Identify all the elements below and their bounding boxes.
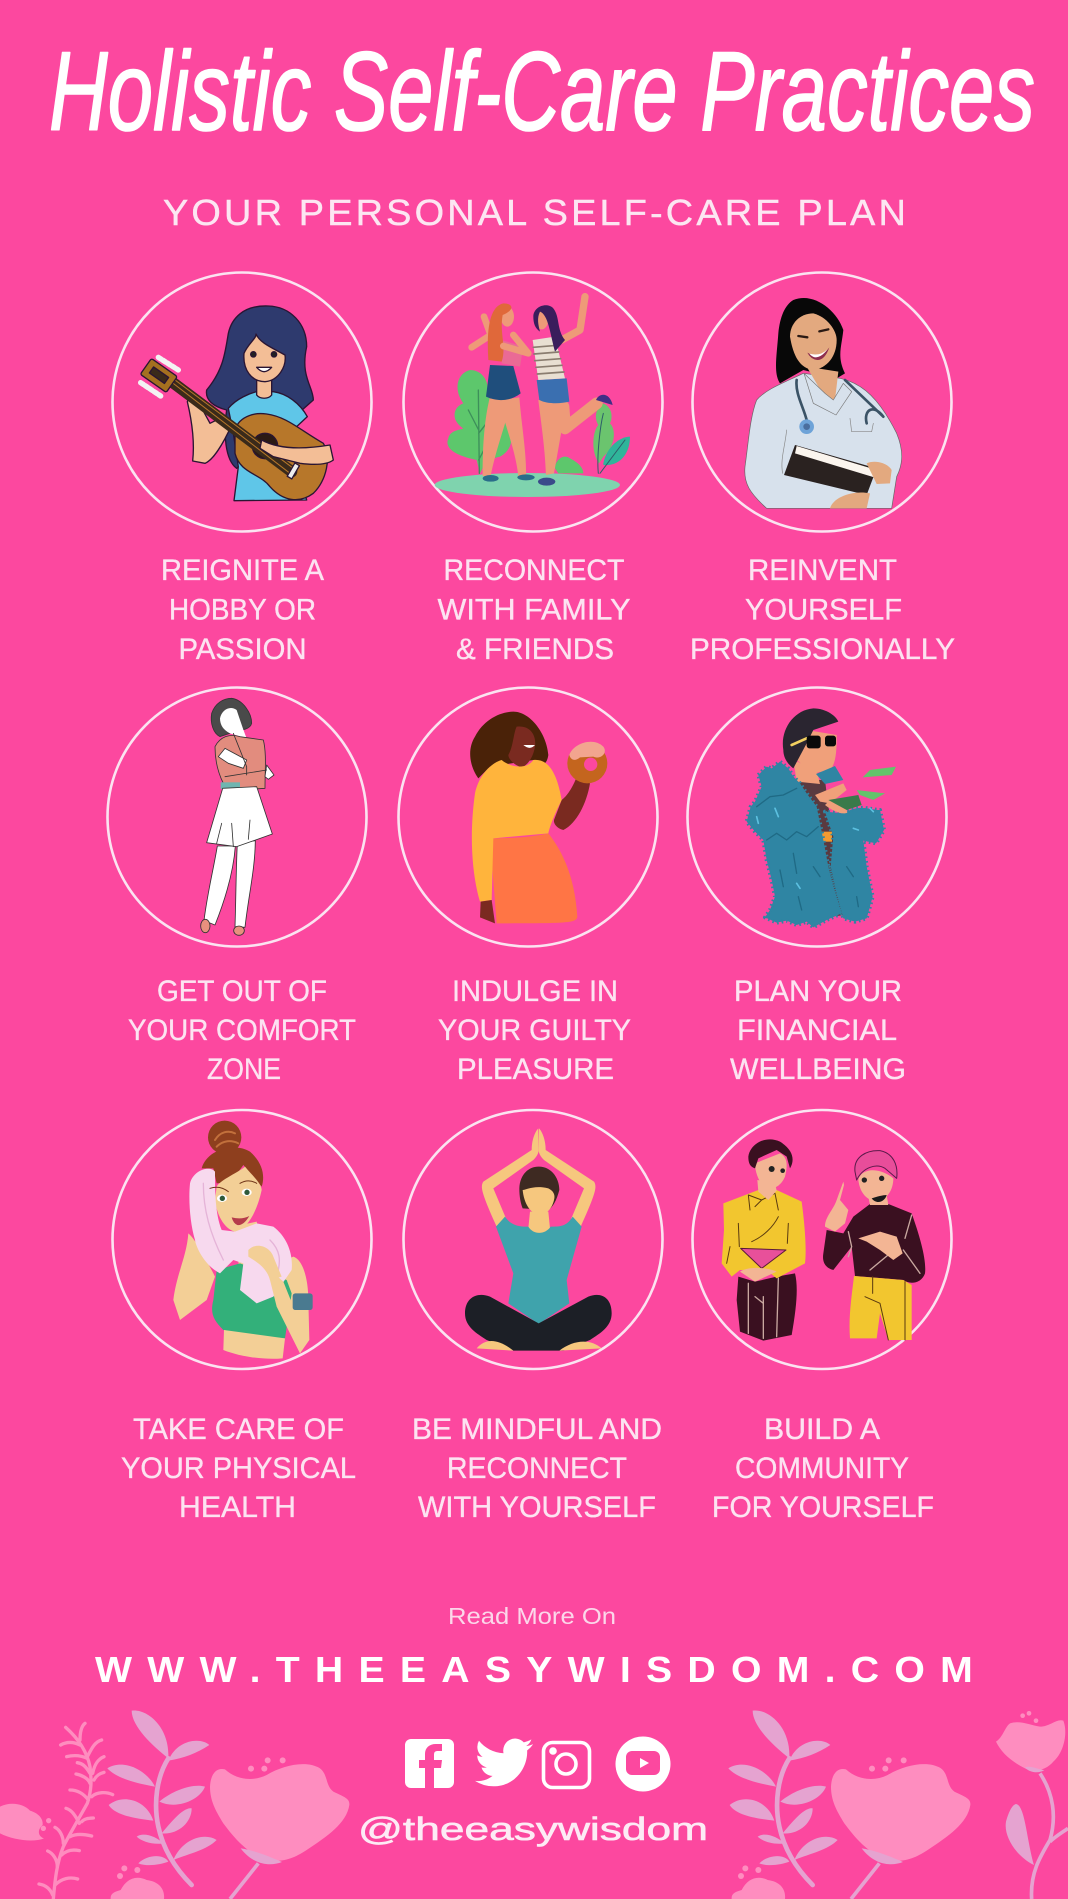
label [128, 975, 356, 1086]
label: PLEASURE [457, 1053, 614, 1086]
label [438, 975, 631, 1086]
website url: WWW.THEEASYWISDOM.COM [95, 1649, 988, 1690]
illustration: woman with donut [470, 712, 607, 923]
illustration: man in fur coat with money [747, 708, 896, 927]
subtitle: YOUR PERSONAL SELF-CARE PLAN [163, 192, 909, 233]
label: HEALTH [179, 1491, 296, 1524]
circle [108, 688, 366, 946]
label [730, 975, 906, 1086]
label: RECONNECT [444, 554, 624, 587]
label [121, 1413, 356, 1524]
label: TAKE CARE OF [133, 1413, 344, 1446]
read more text: Read More On [448, 1603, 616, 1629]
label: COMMUNITY [735, 1452, 909, 1485]
social icons [405, 1736, 670, 1792]
label: PLAN YOUR [734, 975, 902, 1008]
label: GET OUT OF [157, 975, 327, 1008]
panel: financial wellbeing [688, 688, 946, 1086]
label: BUILD A [764, 1413, 880, 1446]
label [412, 1413, 662, 1524]
panel: physical health [112, 1110, 372, 1524]
label: RECONNECT [447, 1452, 627, 1485]
label: REIGNITE A [161, 554, 324, 587]
label [438, 554, 630, 666]
label: FOR YOURSELF [712, 1491, 934, 1524]
label: WITH YOURSELF [418, 1491, 656, 1524]
panel: comfort zone [108, 688, 366, 1086]
label: INDULGE IN [452, 975, 618, 1008]
label: WITH FAMILY [438, 594, 630, 626]
label: PROFESSIONALLY [690, 633, 955, 666]
bloom group: leaf branch, flower and bud [107, 1710, 349, 1899]
label: & FRIENDS [456, 633, 614, 666]
label: YOUR GUILTY [438, 1014, 631, 1047]
icon: twitter [475, 1739, 533, 1786]
circle [112, 1110, 372, 1369]
icon: instagram [544, 1742, 590, 1788]
panel: reinvent yourself [690, 272, 955, 666]
label: PASSION [178, 633, 306, 666]
label: WELLBEING [730, 1053, 906, 1086]
label: ZONE [207, 1053, 281, 1086]
label: YOUR COMFORT [128, 1014, 356, 1047]
illustration: meditating person [465, 1128, 612, 1351]
label [690, 554, 955, 666]
repeated bloom group [728, 1710, 970, 1899]
illustration: woman in white skirt [201, 698, 274, 935]
label: YOURSELF [745, 594, 902, 626]
fern [39, 1723, 113, 1899]
circle [692, 272, 952, 532]
label: FINANCIAL [737, 1014, 897, 1047]
icon: facebook [405, 1739, 454, 1788]
floral decoration: right [728, 1710, 1068, 1899]
circle [688, 688, 946, 946]
icon: youtube [616, 1736, 670, 1792]
circle [404, 1110, 662, 1369]
circle [398, 688, 658, 946]
label: YOUR PHYSICAL [121, 1452, 356, 1485]
label: BE MINDFUL AND [412, 1413, 662, 1446]
panel: be mindful [404, 1110, 662, 1524]
label [712, 1413, 934, 1524]
illustration: two friends dancing [435, 297, 630, 497]
label: REINVENT [748, 554, 897, 587]
label: HOBBY OR [169, 594, 316, 626]
partial flower at left edge [0, 1804, 51, 1840]
illustration: woman with towel [173, 1121, 313, 1359]
circle [404, 272, 662, 532]
panel: build a community [692, 1110, 952, 1524]
panel: reconnect with family [404, 272, 662, 666]
panel: guilty pleasure [398, 688, 658, 1086]
tall flower at right edge [996, 1711, 1068, 1899]
panel: reignite a hobby [112, 272, 372, 666]
circle [692, 1110, 952, 1369]
floral decoration: left [0, 1710, 349, 1899]
social handle: @theeasywisdom [358, 1811, 708, 1847]
illustration: woman playing guitar [140, 306, 333, 501]
label [161, 554, 324, 666]
illustration: doctor with book [745, 298, 902, 508]
illustration: two men talking [722, 1139, 925, 1341]
circle [112, 272, 372, 532]
